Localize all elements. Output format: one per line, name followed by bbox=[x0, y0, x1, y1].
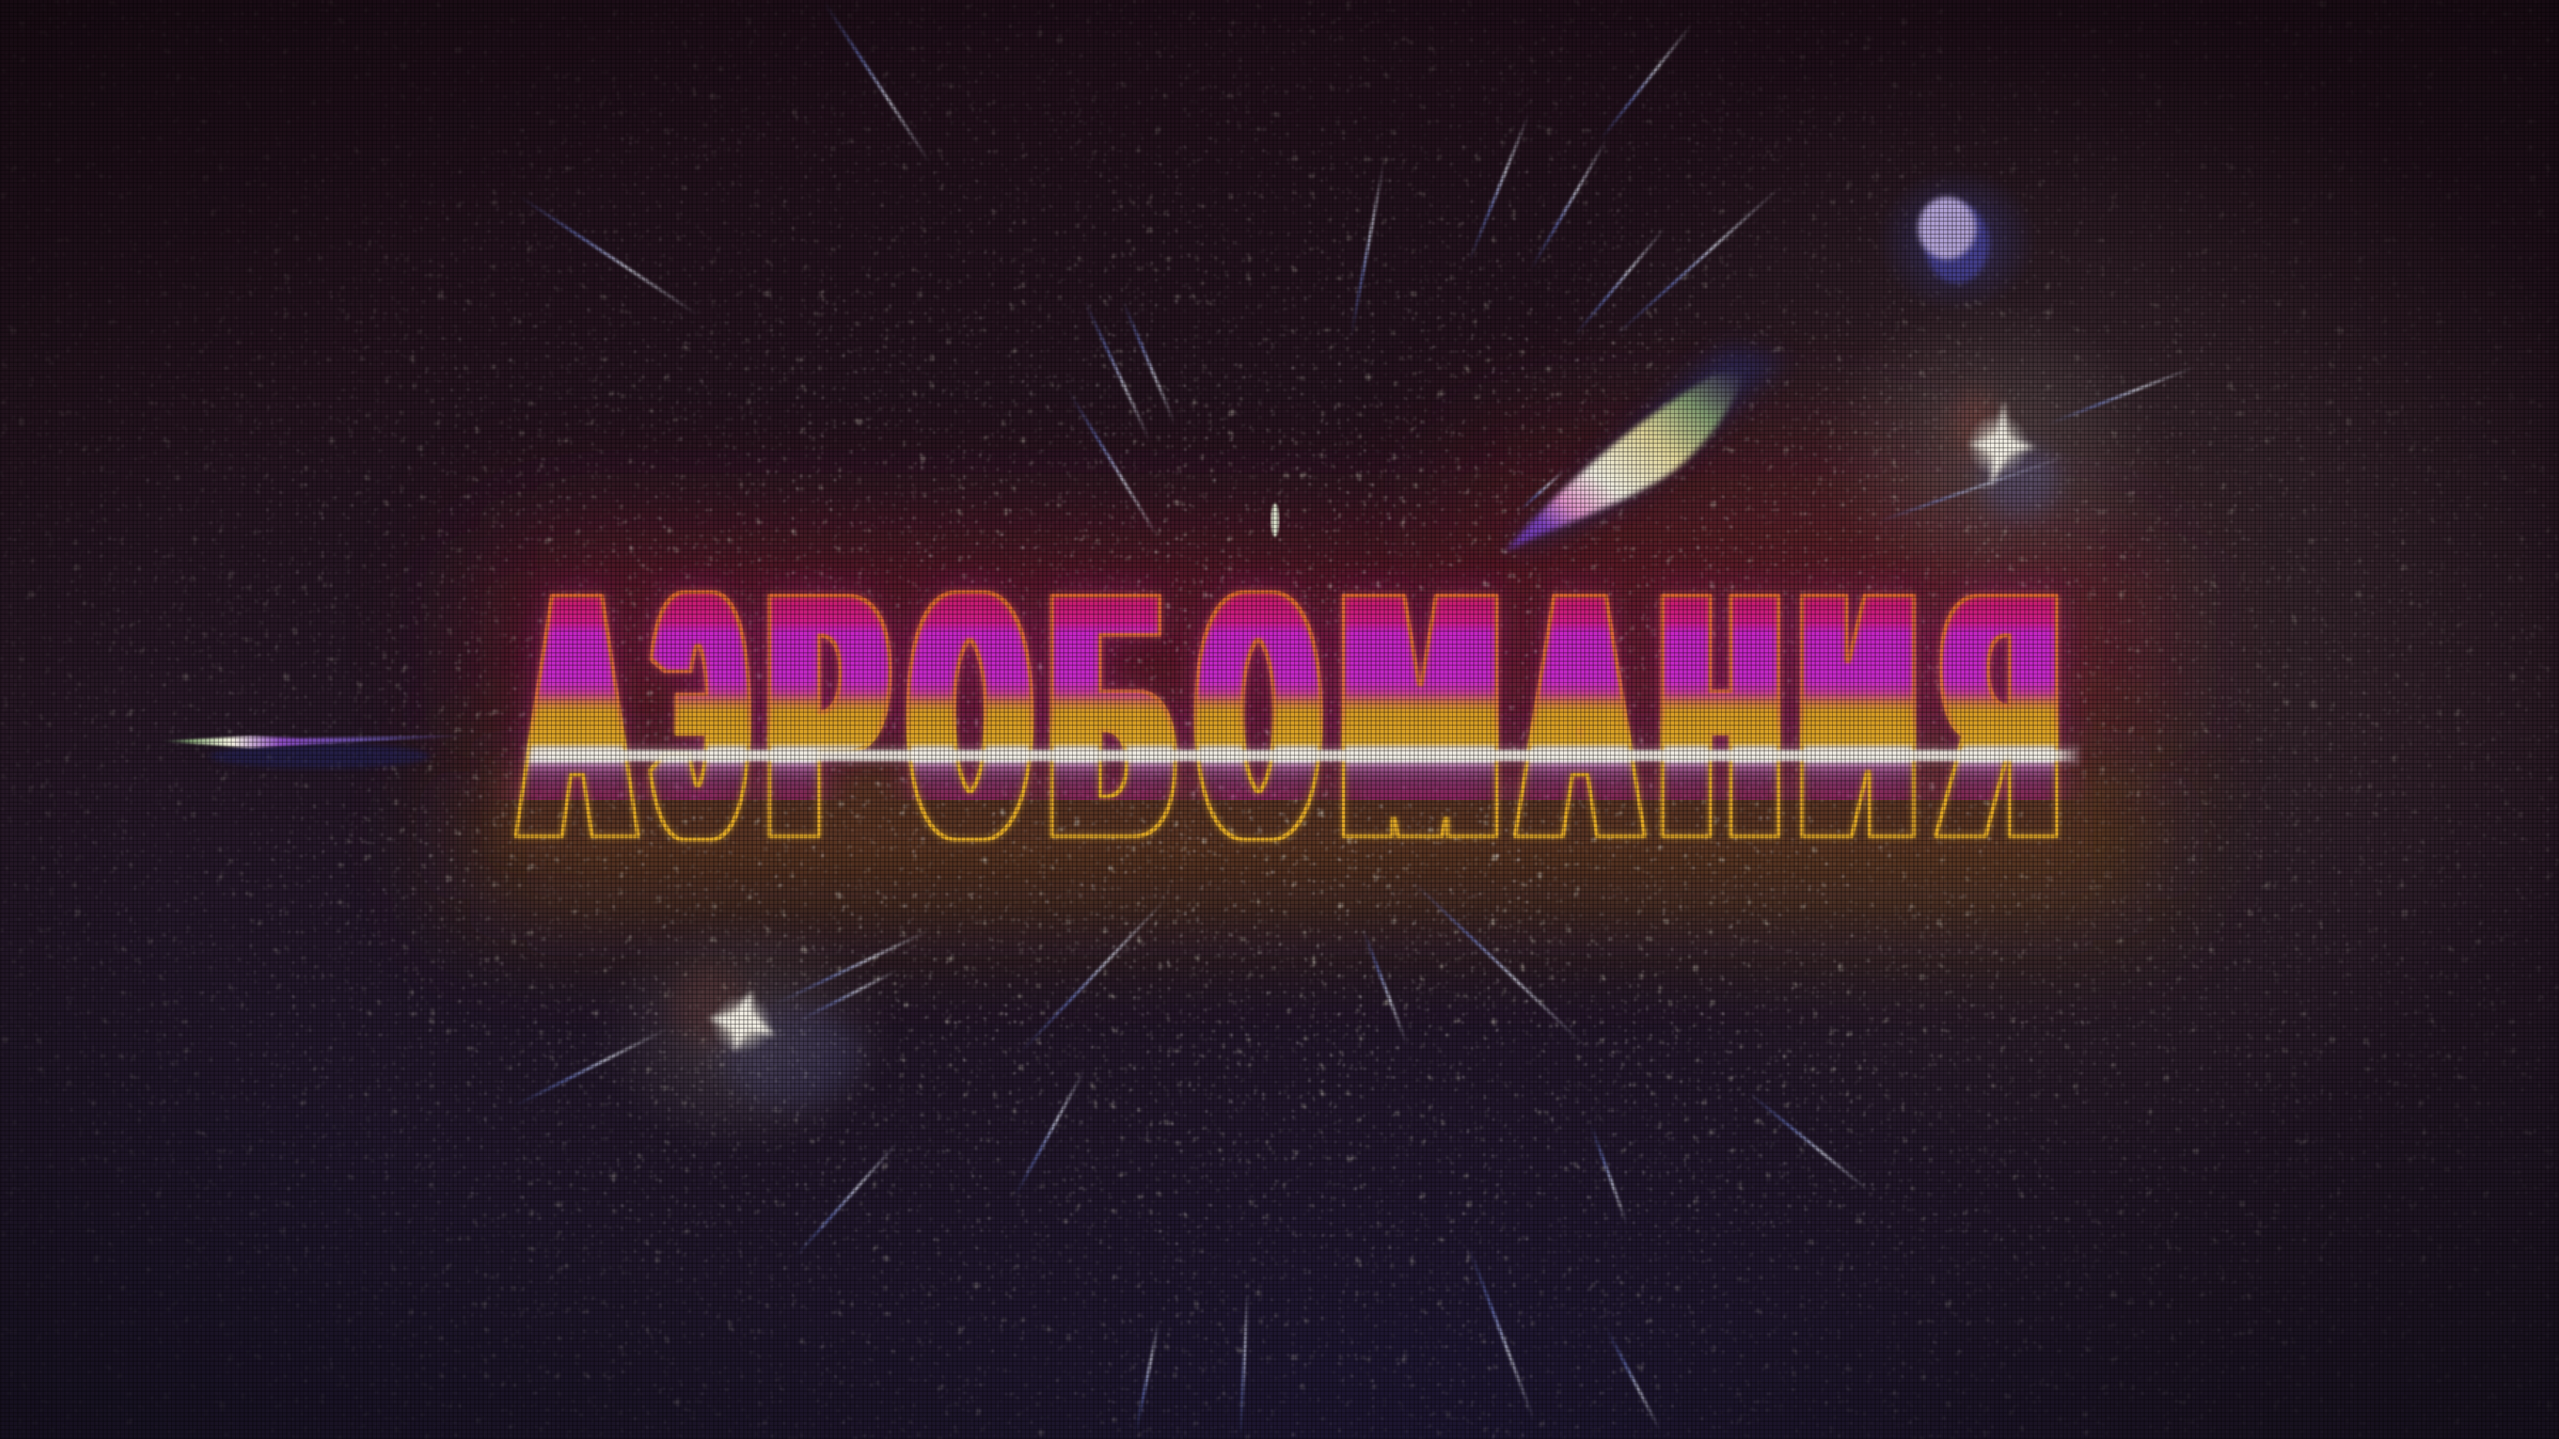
planet with blue halo bbox=[1877, 168, 2037, 312]
title gradient fill: А bbox=[525, 520, 629, 910]
title neon outline: О bbox=[915, 520, 1025, 910]
title neon outline: И bbox=[1805, 520, 1911, 910]
sparkle star upper right bbox=[1820, 300, 2160, 600]
white horizon line bbox=[525, 745, 2080, 765]
title glow: red upper and amber lower bbox=[470, 420, 2160, 900]
comet with iridescent tail bbox=[1505, 345, 1785, 552]
title magenta back glow: О bbox=[915, 520, 1025, 910]
title gradient fill: О bbox=[1203, 520, 1314, 910]
title magenta back glow: Н bbox=[1665, 520, 1776, 910]
title neon outline: О bbox=[1203, 520, 1314, 910]
small glint above title bbox=[1271, 503, 1279, 537]
title magenta back glow: О bbox=[1203, 520, 1314, 910]
title magenta back glow: Б bbox=[1054, 520, 1168, 910]
title magenta back glow: И bbox=[1805, 520, 1911, 910]
title gradient fill: И bbox=[1805, 520, 1911, 910]
title: АЭРОБОМАНИЯ: Я bbox=[1946, 520, 2054, 910]
title gradient fill: Р bbox=[771, 520, 883, 910]
title neon outline: Б bbox=[1054, 520, 1168, 910]
light streaks radiating from centre bbox=[514, 2, 2195, 1430]
title neon outline: А bbox=[1524, 520, 1636, 910]
title: АЭРОБОМАНИЯ: Я bbox=[1946, 520, 2054, 910]
title neon outline: Н bbox=[1665, 520, 1776, 910]
horizontal left streak bbox=[160, 735, 480, 768]
title: АЭРОБОМАНИЯ bbox=[502, 574, 2084, 846]
title neon outline: Р bbox=[771, 520, 883, 910]
title: АЭРОБОМАНИЯ: Я bbox=[1946, 520, 2054, 910]
title magenta back glow: Э bbox=[660, 520, 741, 910]
title neon outline: А bbox=[525, 520, 629, 910]
title neon outline: Э bbox=[660, 520, 741, 910]
title gradient fill: М bbox=[1344, 520, 1496, 910]
title magenta back glow: Р bbox=[771, 520, 883, 910]
sparkle star lower left bbox=[595, 915, 895, 1155]
title neon outline: М bbox=[1344, 520, 1496, 910]
title magenta back glow: М bbox=[1344, 520, 1496, 910]
title gradient fill: Б bbox=[1054, 520, 1168, 910]
title gradient fill: О bbox=[915, 520, 1025, 910]
title gradient fill: Н bbox=[1665, 520, 1776, 910]
title magenta back glow: А bbox=[1524, 520, 1636, 910]
title gradient fill: Э bbox=[660, 520, 741, 910]
title gradient fill: А bbox=[1524, 520, 1636, 910]
title magenta back glow: А bbox=[525, 520, 629, 910]
